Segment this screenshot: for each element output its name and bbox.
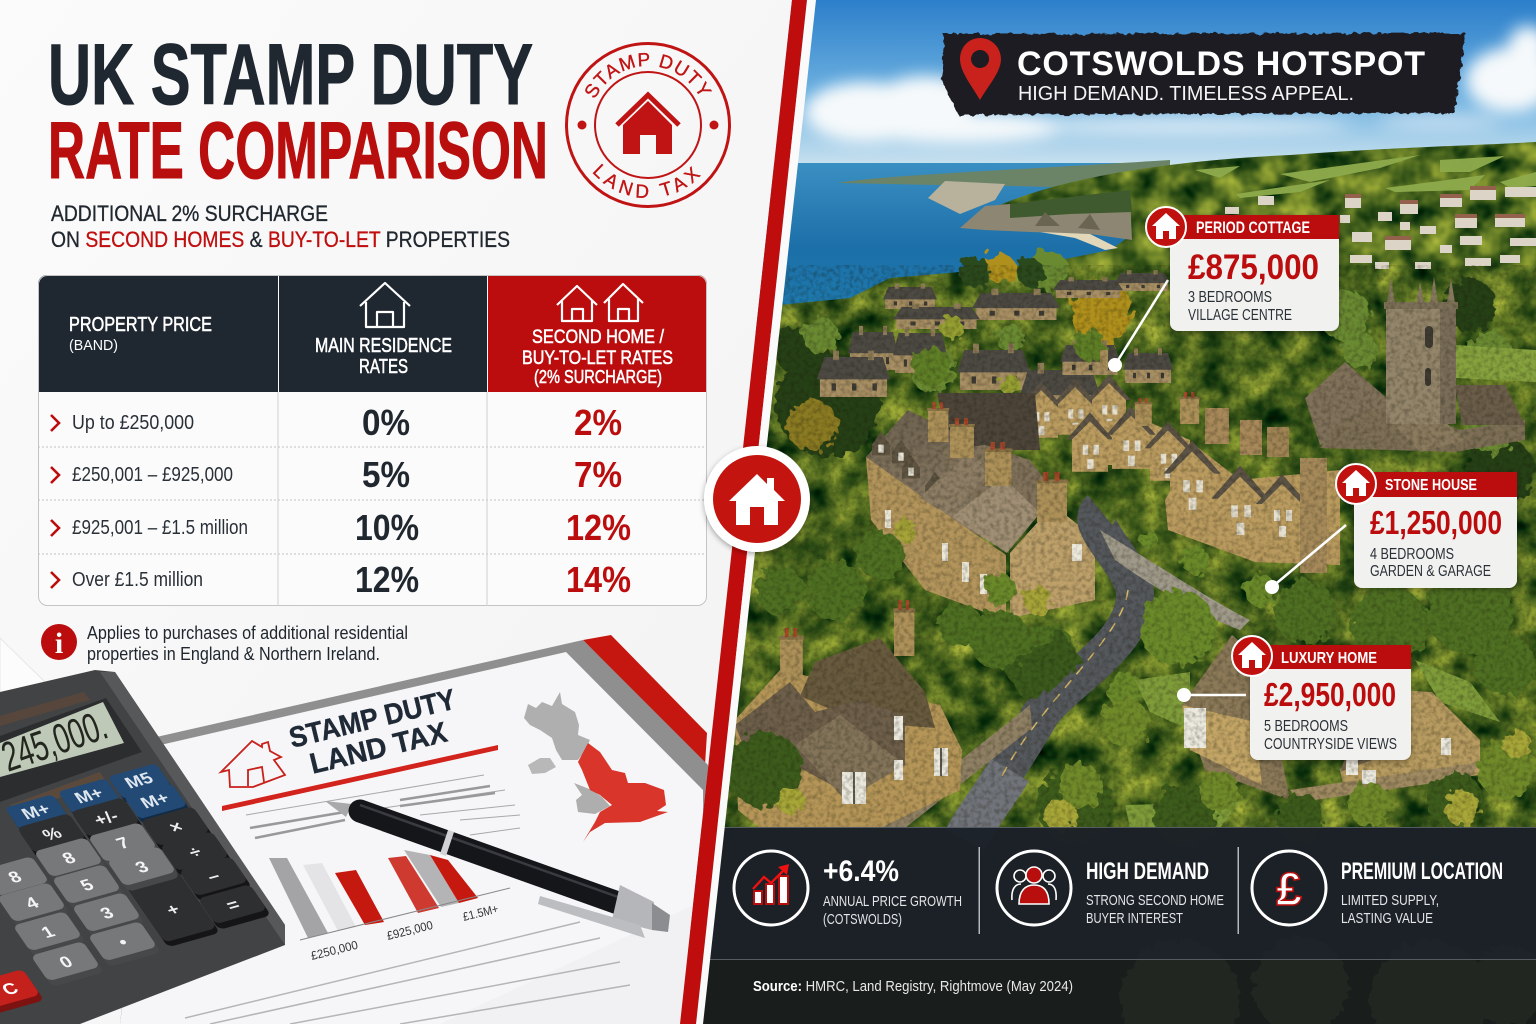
calculator keys: 8: [5, 868, 25, 886]
callout: period cottage: 3 BEDROOMS: [1188, 289, 1272, 306]
document red rule: [222, 745, 498, 811]
icon: two houses: [557, 284, 643, 321]
title: RATE COMPARISON: [48, 106, 548, 196]
second home rates: 14%: [566, 559, 631, 600]
sky: [690, 0, 1536, 170]
back tree blobs: [773, 250, 1534, 550]
main residence rates: 0%: [362, 402, 410, 443]
mid trees: [912, 315, 1106, 395]
header text: [69, 314, 673, 387]
left panel background: [0, 0, 792, 1024]
row labels: Over £1.5 million: [72, 569, 203, 591]
calculator keys: =: [222, 896, 244, 914]
row labels: £925,001 – £1.5 million: [72, 517, 248, 539]
land base: foliage texture: [690, 140, 1536, 840]
row labels: £250,001 – £925,000: [72, 464, 233, 486]
stat: price growth: +6.4%: [823, 855, 899, 888]
main residence rates: 10%: [355, 507, 419, 548]
note text: Applies to purchases of additional residential: [87, 623, 408, 643]
calculator keys: M+: [137, 789, 173, 812]
header text: (2% SURCHARGE): [534, 367, 662, 387]
dark base under bottom strips: [690, 828, 1536, 1024]
stat: premium location: LASTING VALUE: [1341, 910, 1433, 927]
title: [48, 27, 548, 196]
stat: high demand: HIGH DEMAND: [1086, 858, 1209, 885]
document heading: LAND TAX: [307, 716, 451, 781]
stamp: Stamp Duty Land Tax: [565, 42, 731, 208]
row labels: Up to £250,000: [72, 412, 194, 434]
distant headland: [838, 160, 1170, 190]
stamp house icon: [617, 95, 679, 154]
banner tagline: HIGH DEMAND. TIMELESS APPEAL.: [1018, 83, 1354, 105]
info note: [41, 623, 408, 664]
calculator keys: −: [203, 868, 225, 886]
calculator keys: ×: [165, 818, 187, 836]
luxury home: [1182, 635, 1480, 802]
icon: single house: [360, 283, 410, 327]
far cottage rows: [817, 270, 1173, 415]
bar chart: [269, 850, 510, 963]
calculator keys: 1: [38, 923, 58, 941]
callout: stone house: £1,250,000: [1370, 504, 1502, 541]
callout: stone house: GARDEN & GARAGE: [1370, 563, 1491, 580]
calculator keys: M+: [71, 784, 107, 807]
lawn by church: [1456, 345, 1536, 382]
calculator keys: [0, 763, 271, 1015]
callout: period cottage: £875,000: [1188, 248, 1319, 287]
texture overlay: [690, 265, 1536, 828]
rate comparison table: [38, 275, 707, 606]
calculator: [0, 670, 285, 1024]
calculator keys: 3: [132, 858, 152, 876]
church: [1305, 276, 1525, 452]
divider band: [680, 0, 816, 1024]
foreground foliage: [727, 698, 1533, 847]
main residence rates: 5%: [362, 454, 410, 495]
banner heading: COTSWOLDS HOTSPOT: [1017, 45, 1425, 83]
table header: property price: [38, 275, 278, 392]
chart axis labels: £1.5M+: [461, 902, 500, 924]
callout: luxury home: COUNTRYSIDE VIEWS: [1264, 736, 1397, 753]
calculator keys: +/-: [90, 807, 122, 829]
callout: stone house: 4 BEDROOMS: [1370, 546, 1454, 563]
callout: luxury home: £2,950,000: [1264, 676, 1396, 713]
sea: [690, 163, 1170, 333]
icon: info: i: [55, 627, 63, 660]
header text: MAIN RESIDENCE: [315, 335, 452, 357]
second home rates: [566, 402, 631, 600]
gardens and trees: [756, 519, 1535, 708]
subtitle: [51, 201, 510, 252]
stat: premium location: [1252, 851, 1503, 927]
callout: stone house: [1265, 464, 1517, 594]
chart axis labels: £925,000: [385, 918, 435, 943]
background sheet: [0, 638, 45, 692]
callout: stone house: STONE HOUSE: [1385, 477, 1477, 494]
pavement: [1100, 530, 1250, 630]
clouds: [805, 26, 1536, 143]
callout: period cottage: VILLAGE CENTRE: [1188, 307, 1292, 324]
header text: PROPERTY PRICE: [69, 314, 212, 336]
road: [965, 510, 1135, 840]
title: UK STAMP DUTY: [48, 27, 533, 123]
lawns: [1125, 660, 1500, 828]
second home rates: 12%: [566, 507, 631, 548]
document heading: [290, 688, 452, 774]
second home rates: 2%: [574, 402, 622, 443]
document page: [120, 635, 708, 1024]
main residence rates: [355, 402, 419, 600]
main cottage row: [866, 393, 1095, 620]
distant town: [1225, 186, 1536, 269]
stat: price growth: ANNUAL PRICE GROWTH: [823, 893, 962, 910]
illustration: calculator and document: [0, 635, 708, 1024]
calculator keys: 4: [22, 894, 42, 912]
document text lines: [246, 775, 520, 835]
lower photo trees behind source strip: [1120, 937, 1536, 1024]
icon: map pin: [960, 38, 1001, 100]
subtitle: ADDITIONAL 2% SURCHARGE: [51, 201, 328, 226]
strip dividers: [690, 827, 1536, 960]
note text: properties in England & Northern Ireland.: [87, 644, 380, 664]
second home rates: 7%: [574, 454, 622, 495]
document house icon: [221, 741, 285, 787]
stats strip background: [690, 828, 1536, 1024]
source line: Source: HMRC, Land Registry, Rightmove (May 2024): [753, 978, 1073, 995]
right cottage row: [1019, 350, 1340, 573]
stamp upper text: STAMP DUTY: [585, 52, 712, 98]
stat: price growth: [734, 851, 962, 928]
calculator keys: •: [114, 933, 132, 951]
calculator keys: %: [39, 824, 65, 844]
subtitle: ON SECOND HOMES & BUY-TO-LET PROPERTIES: [51, 227, 510, 252]
header text: (BAND): [69, 337, 118, 354]
chart axis labels: [311, 906, 498, 960]
icon: rising chart: [753, 864, 789, 904]
calculator keys: M+: [18, 800, 54, 823]
callout: luxury home: 5 BEDROOMS: [1264, 718, 1348, 735]
UK map: [524, 692, 668, 842]
pen: [325, 801, 670, 938]
stat: premium location: LIMITED SUPPLY,: [1341, 892, 1439, 909]
stat: high demand: BUYER INTEREST: [1086, 910, 1183, 927]
calculator display number: 245,000.: [0, 701, 113, 781]
header text: BUY-TO-LET RATES: [522, 347, 673, 369]
stone wall by road: [875, 705, 1032, 828]
central house badge: [704, 446, 810, 552]
photo: Cotswolds village aerial view: [690, 0, 1536, 1024]
callout: luxury home: LUXURY HOME: [1281, 650, 1377, 667]
table header: main residence: [279, 275, 487, 392]
row labels: [72, 412, 248, 591]
main residence rates: 12%: [355, 559, 419, 600]
large cottage bottom left: [735, 600, 962, 828]
stamp lower text: LAND TAX: [592, 164, 701, 198]
note text: [87, 623, 408, 664]
calculator keys: 3: [97, 904, 117, 922]
banner: Cotswolds Hotspot: [942, 33, 1466, 115]
calculator keys: M5: [121, 769, 157, 792]
calculator keys: 8: [59, 849, 79, 867]
header text: RATES: [359, 356, 408, 378]
calculator keys: 5: [77, 876, 97, 894]
icon: info: [41, 624, 77, 660]
document heading: STAMP DUTY: [286, 684, 459, 755]
calculator keys: ÷: [185, 843, 206, 861]
chart axis labels: £250,000: [309, 938, 360, 963]
stat: high demand: [997, 851, 1224, 927]
header text: SECOND HOME /: [532, 326, 664, 348]
table header: second home: [488, 275, 707, 392]
calculator keys: +: [162, 900, 184, 919]
callout: period cottage: [1108, 207, 1339, 372]
icon: pound sign: £: [1276, 863, 1302, 915]
row chevrons: [51, 415, 59, 588]
callout: luxury home: [1177, 636, 1411, 760]
callout: period cottage: PERIOD COTTAGE: [1196, 218, 1310, 237]
cliffs: [928, 181, 1132, 250]
icon: people: [1012, 867, 1056, 904]
stat: high demand: STRONG SECOND HOME: [1086, 892, 1224, 909]
calculator keys: 7: [113, 834, 133, 852]
stat separators: [978, 847, 1239, 934]
hill fields: [1195, 155, 1536, 198]
calculator keys: 0: [56, 953, 76, 971]
stat: price growth: (COTSWOLDS): [823, 911, 902, 928]
